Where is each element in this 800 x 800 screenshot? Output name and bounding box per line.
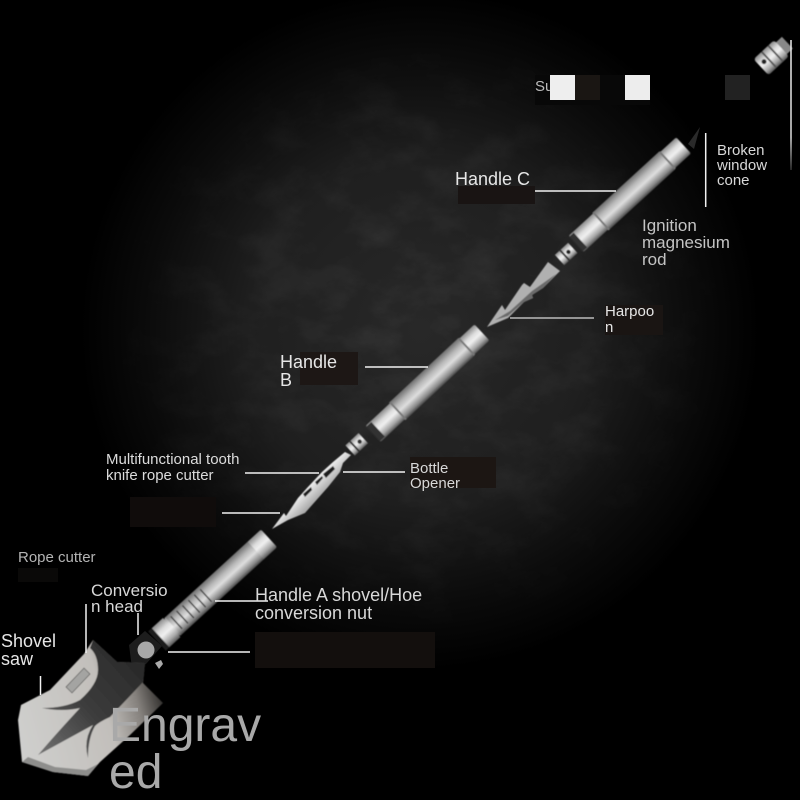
shovel bevel edge <box>22 757 98 776</box>
label: Handle B: Handle <box>280 352 337 372</box>
icon: top bolt piece <box>754 35 795 75</box>
label: Handle B: B <box>280 370 292 390</box>
censored label patches at top <box>535 75 750 105</box>
shovel engraved plate <box>66 668 90 693</box>
label: Ignition magnesium rod: rod <box>642 250 667 269</box>
label: Ignition magnesium rod: Ignition <box>642 216 697 235</box>
multifunctional tooth knife with bottle opener <box>272 433 368 529</box>
censored label patches at top: Su <box>535 78 553 95</box>
shovel blade <box>18 640 163 776</box>
shovel dark centre spine <box>38 640 145 758</box>
label: Handle A shovel/Hoe conversion nut: conversion nut <box>255 603 372 623</box>
label: Bottle Opener: Bottle <box>410 460 448 477</box>
label: Broken window cone: window <box>716 157 767 174</box>
label: Broken window cone: cone <box>717 172 750 189</box>
label: Ignition magnesium rod: magnesium <box>642 233 730 252</box>
label: Engraved: Engrav <box>109 699 261 752</box>
label: Handle C: Handle C <box>455 169 530 189</box>
label: Multifunctional tooth knife rope cutter: Multifunctional tooth <box>106 451 239 468</box>
handle C <box>568 137 692 253</box>
label: Harpoon: n <box>605 319 613 336</box>
leader lines <box>40 40 791 695</box>
label: Broken window cone: Broken <box>717 142 765 159</box>
label: Conversion head: n head <box>91 597 143 616</box>
handle B <box>365 324 490 443</box>
harpoon <box>487 243 578 327</box>
label: Handle A shovel/Hoe conversion nut: Handle A shovel/Hoe <box>255 585 422 605</box>
label: Multifunctional tooth knife rope cutter: knife rope cutter <box>106 467 214 484</box>
handle A <box>148 529 278 651</box>
label: Shovel saw: saw <box>1 649 34 669</box>
icon: broken window cone tip <box>688 127 700 149</box>
label: Bottle Opener: Opener <box>410 475 460 492</box>
smudged text patches <box>18 186 663 668</box>
label: Engraved: ed <box>109 746 162 799</box>
label: Conversion head: Conversio <box>91 581 168 600</box>
background: dark textured stone <box>126 40 713 624</box>
label: Harpoon: Harpoo <box>605 303 654 320</box>
conversion head <box>129 631 163 669</box>
label: Rope cutter: Rope cutter <box>18 549 96 566</box>
label: Shovel saw: Shovel <box>1 631 56 651</box>
